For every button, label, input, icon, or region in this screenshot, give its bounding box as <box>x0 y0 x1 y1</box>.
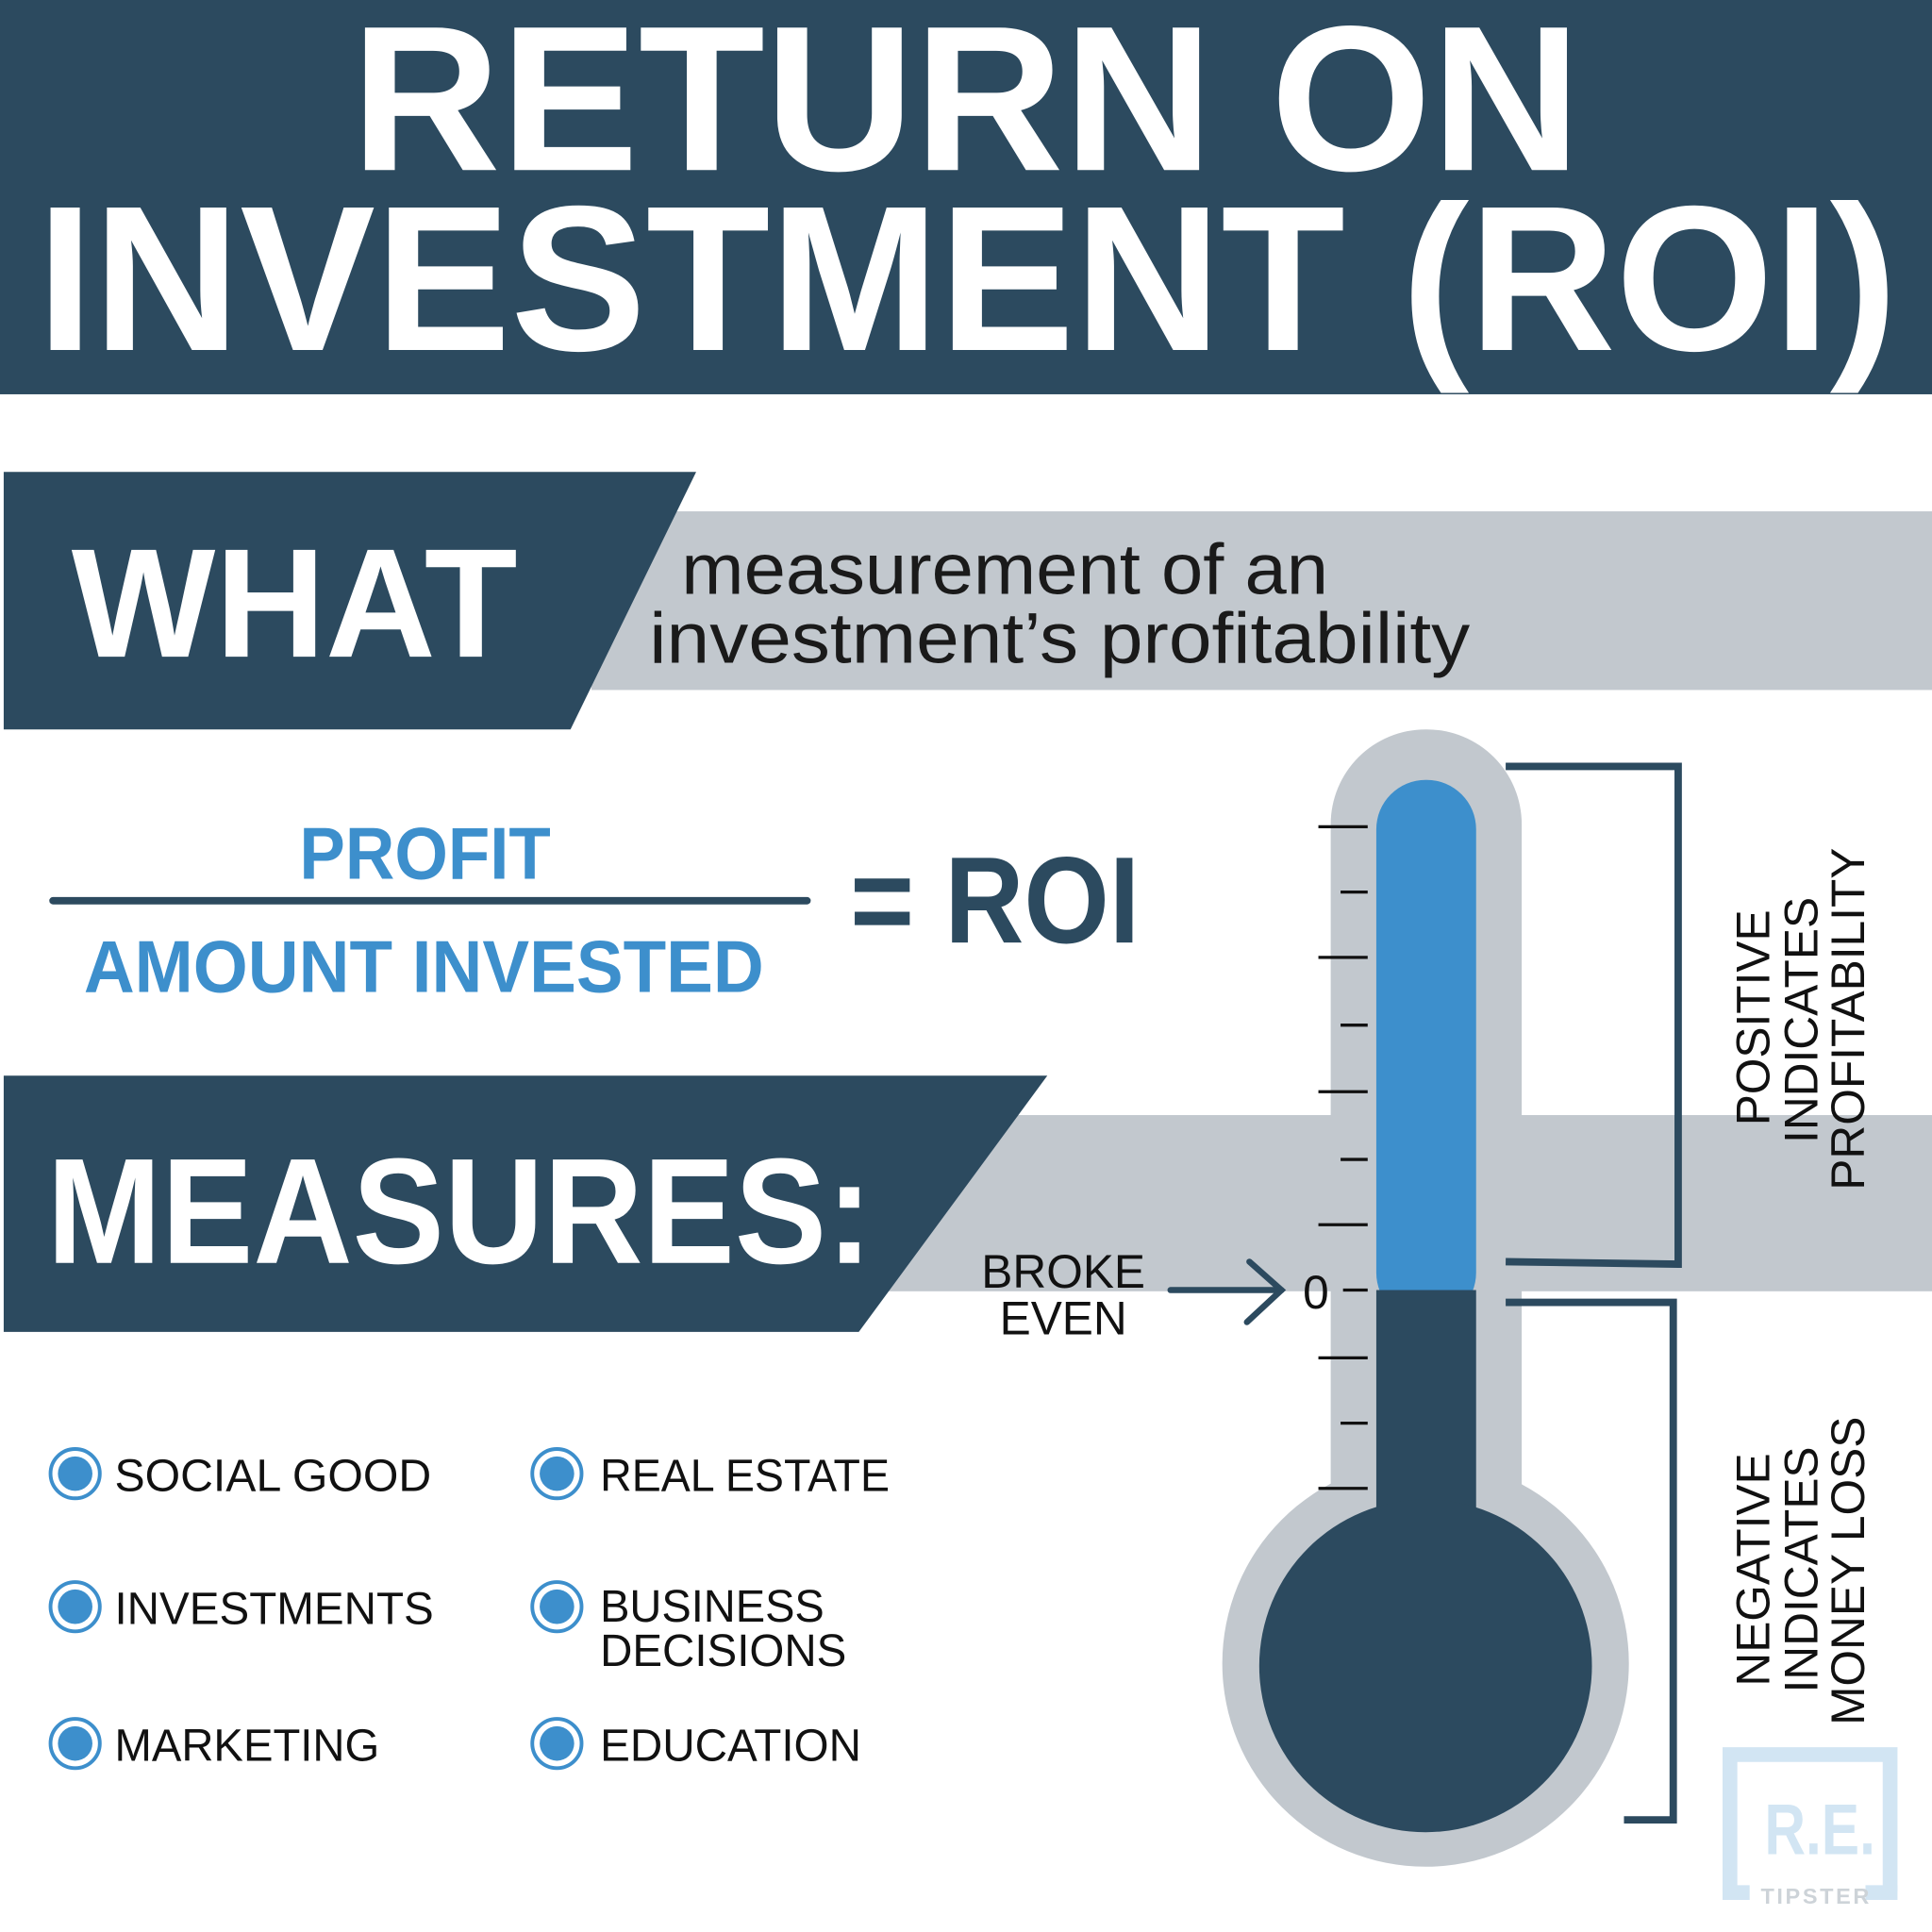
list of measures: REAL ESTATE <box>600 1450 890 1501</box>
logo: TIPSTER <box>1760 1884 1869 1908</box>
label: negative: INDICATES <box>1775 1446 1828 1693</box>
definition text: investment’s profitability <box>649 599 1470 679</box>
title: INVESTMENT (ROI) <box>37 163 1897 394</box>
heading: what: WHAT <box>72 516 518 690</box>
header band <box>0 0 1932 394</box>
label: positive: POSITIVE <box>1727 909 1780 1125</box>
bracket: negative <box>1506 1303 1674 1820</box>
formula <box>49 811 1140 1008</box>
label: positive: PROFITABILITY <box>1822 848 1874 1191</box>
list of measures: MARKETING <box>114 1720 379 1771</box>
definition text <box>649 530 1470 679</box>
label: negative: NEGATIVE <box>1727 1453 1780 1687</box>
panel: what <box>4 472 1932 729</box>
callout: broke even <box>981 1245 1281 1345</box>
definition text: measurement of an <box>681 530 1328 610</box>
thermometer: 0 <box>1303 1266 1329 1319</box>
list of measures: INVESTMENTS <box>114 1583 434 1634</box>
panel: measures <box>4 1075 1932 1332</box>
formula: AMOUNT INVESTED <box>84 924 764 1008</box>
list of measures: SOCIAL GOOD <box>114 1450 431 1501</box>
bracket: positive <box>1506 766 1678 1264</box>
list of measures <box>51 1449 890 1771</box>
arrow <box>1171 1261 1281 1322</box>
list of measures: DECISIONS <box>600 1625 846 1676</box>
callout: broke even: BROKE <box>981 1245 1145 1298</box>
label: negative: MONEY LOSS <box>1822 1417 1874 1725</box>
label: positive: INDICATES <box>1775 897 1828 1143</box>
label: negative <box>1727 1417 1874 1725</box>
logo: R.E. <box>1764 1790 1875 1871</box>
formula: = ROI <box>850 831 1140 969</box>
logo <box>1723 1755 1897 1908</box>
title <box>37 0 1897 394</box>
list of measures: BUSINESS <box>600 1581 824 1632</box>
thermometer <box>1223 729 1629 1867</box>
callout: broke even: EVEN <box>1000 1292 1127 1345</box>
heading: measures: MEASURES: <box>47 1127 873 1295</box>
label: positive <box>1727 848 1874 1191</box>
scale ticks <box>1319 826 1368 1489</box>
list of measures: EDUCATION <box>600 1720 861 1771</box>
formula: PROFIT <box>299 811 551 894</box>
